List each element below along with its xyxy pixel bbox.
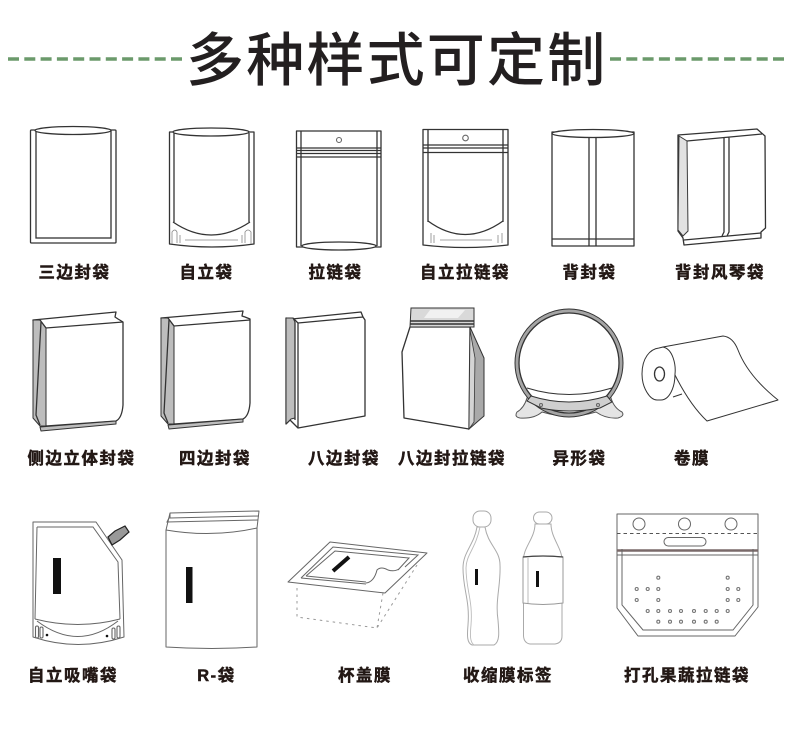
icon: back seal bag [552, 130, 634, 246]
label: R-袋 [197, 666, 236, 685]
item: stand-up pouch [170, 128, 254, 282]
item: eight-side zipper bag [398, 308, 506, 468]
item: side gusset bag [28, 312, 135, 468]
icon: zipper bag [296, 131, 381, 250]
icon: four-side seal bag [161, 311, 250, 429]
label: 三边封袋 [39, 263, 110, 282]
item: cup lid film [288, 542, 427, 685]
label: 背封风琴袋 [675, 263, 765, 282]
icon: cup lid film [288, 542, 427, 628]
icon: perforated produce zipper bag [617, 514, 758, 636]
icon: retort bag [166, 511, 259, 648]
item: retort bag [166, 511, 259, 685]
item: perforated produce zipper bag [617, 514, 758, 685]
icon: shrink-wrapped bottles [463, 511, 563, 645]
label: 拉链袋 [309, 263, 362, 282]
icon: eight-side zipper bag [402, 308, 484, 429]
title text: 多种样式可定制 [186, 28, 607, 94]
item: eight-side seal bag [286, 312, 380, 468]
label: 卷膜 [674, 449, 710, 468]
label: 自立袋 [180, 263, 233, 282]
icon: spout pouch [33, 522, 129, 644]
icon: back seal gusset bag [678, 129, 766, 245]
left dashed rule [8, 57, 183, 61]
icon: eight-side seal bag [286, 312, 365, 428]
item: shrink film labels on bottles [463, 511, 563, 685]
label: 八边封袋 [308, 449, 380, 468]
item: shaped bag [515, 309, 623, 468]
item: stand-up zipper bag [420, 130, 510, 282]
label: 杯盖膜 [338, 666, 392, 685]
item: zipper bag [296, 131, 381, 282]
label: 八边封拉链袋 [398, 449, 506, 468]
label: 收缩膜标签 [463, 666, 553, 685]
label: 侧边立体封袋 [28, 449, 135, 468]
item: back seal gusset bag [675, 129, 766, 282]
label: 异形袋 [553, 449, 606, 468]
label: 背封袋 [563, 263, 616, 282]
item: back seal bag [552, 130, 634, 282]
bottle one [463, 511, 500, 645]
item: three-side seal bag [30, 126, 116, 282]
label: 打孔果蔬拉链袋 [624, 666, 750, 685]
icon: stand-up pouch [170, 128, 254, 247]
item: four-side seal bag [161, 311, 251, 468]
bottle two [523, 512, 563, 644]
label: 自立拉链袋 [420, 263, 510, 282]
icon: stand-up zipper bag [423, 130, 508, 248]
perforation holes [635, 576, 740, 623]
label: 自立吸嘴袋 [28, 666, 118, 685]
icon: shaped bag [515, 309, 623, 418]
label: 四边封袋 [179, 449, 251, 468]
icon: side gusset bag [33, 312, 123, 431]
item: film roll [642, 336, 778, 468]
icon: film roll [642, 336, 778, 421]
item: spout pouch [28, 522, 129, 685]
right dashed rule [610, 57, 785, 61]
icon: three-side seal bag [30, 126, 116, 243]
